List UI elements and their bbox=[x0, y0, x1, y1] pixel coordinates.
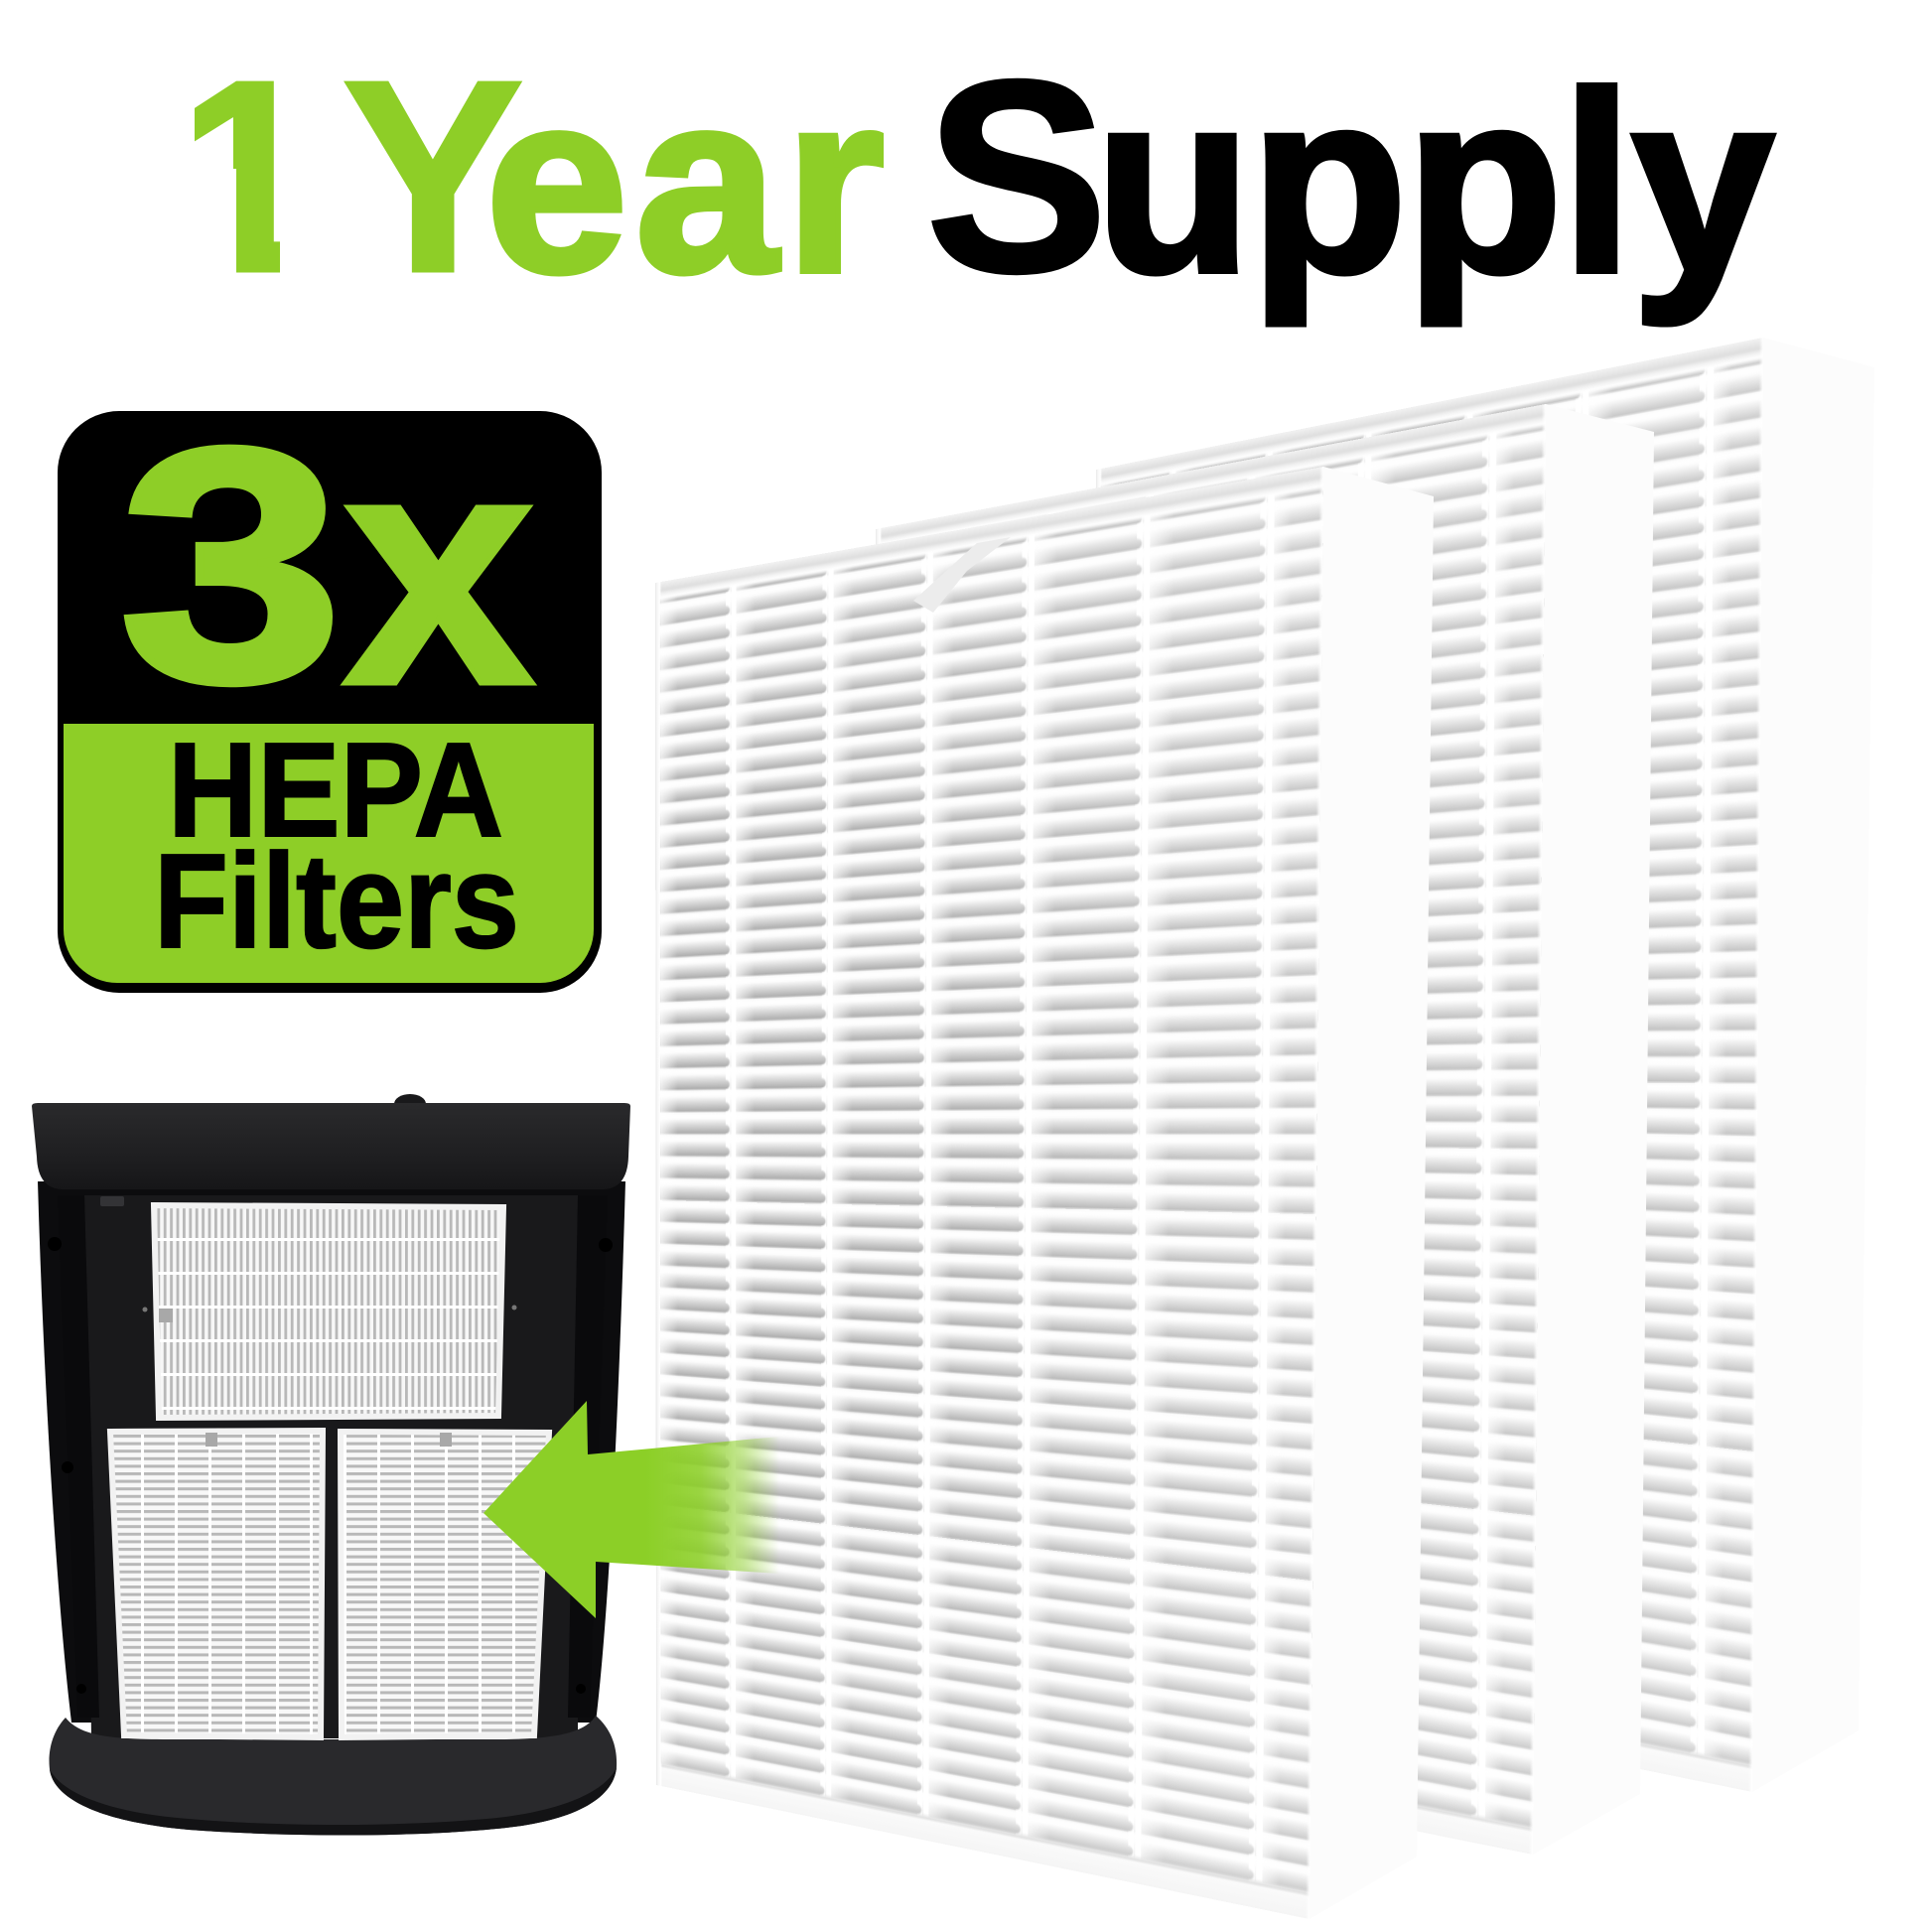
purifier top cap bbox=[32, 1103, 630, 1189]
front filter side panel bbox=[1311, 467, 1434, 1809]
purifier small pins bbox=[143, 1305, 516, 1312]
top filter tab bbox=[159, 1309, 173, 1322]
title green part: ear bbox=[485, 39, 885, 326]
badge 3: 3 bbox=[119, 378, 343, 751]
purifier side column left bbox=[58, 1195, 99, 1718]
purifier knob bbox=[394, 1094, 426, 1114]
lower left filter tab bbox=[206, 1433, 217, 1447]
badge: 3x HEPA Filters bbox=[58, 378, 602, 993]
lower right filter in purifier bbox=[341, 1432, 549, 1737]
title: 1 Year Supply bbox=[195, 77, 1777, 328]
title green part: 1 bbox=[171, 24, 324, 330]
front filter pleated face bbox=[655, 467, 1323, 1919]
title green part bbox=[195, 81, 884, 276]
back filter side panel bbox=[1096, 338, 1874, 1792]
top filter in purifier bbox=[154, 1205, 503, 1418]
air purifier with filters installed bbox=[32, 1094, 630, 1836]
purifier base edge bbox=[50, 1767, 617, 1836]
purifier side column right bbox=[568, 1195, 608, 1718]
purifier inner panel bbox=[84, 1195, 578, 1738]
filter: back HEPA filter bbox=[1096, 338, 1762, 1791]
purifier base bbox=[50, 1716, 617, 1836]
badge Filters: Filters bbox=[154, 826, 519, 976]
badge HEPA: HEPA bbox=[168, 715, 503, 865]
badge x: x bbox=[343, 383, 537, 755]
title black part: upply bbox=[1095, 39, 1776, 327]
lower right filter tab bbox=[440, 1433, 452, 1447]
front filter pull ribbon bbox=[913, 537, 1011, 613]
title black part: S bbox=[925, 24, 1108, 330]
purifier body bbox=[38, 1181, 625, 1723]
badge frame bbox=[58, 411, 602, 993]
back filter pleated face bbox=[1096, 338, 1763, 1792]
title green part: Y bbox=[342, 24, 524, 330]
middle filter side panel bbox=[1534, 404, 1654, 1747]
middle filter pleated face bbox=[876, 404, 1546, 1855]
purifier latch bbox=[100, 1196, 124, 1206]
arrow pointing to filter bbox=[483, 1401, 779, 1618]
purifier screw holes bbox=[48, 1237, 613, 1694]
lower left filter in purifier bbox=[110, 1431, 323, 1737]
filter: front HEPA filter bbox=[655, 467, 1434, 1918]
badge green panel bbox=[64, 724, 594, 983]
filter: middle HEPA filter bbox=[876, 404, 1654, 1854]
